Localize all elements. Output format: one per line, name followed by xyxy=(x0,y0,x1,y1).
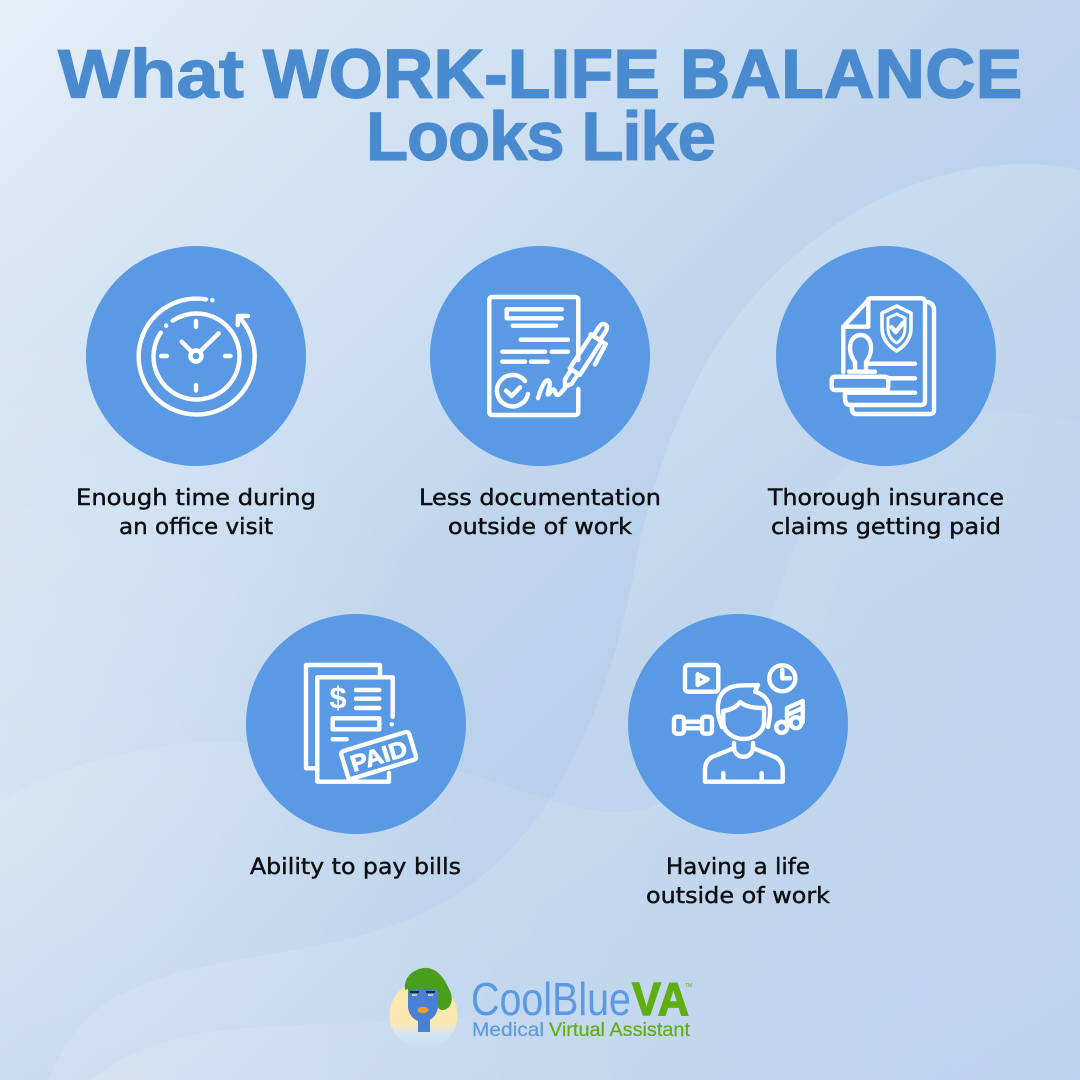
logo wordmark: CoolBlue xyxy=(471,973,631,1025)
label: insurance claims: claims getting paid xyxy=(771,514,1001,540)
label: insurance claims xyxy=(767,485,1004,540)
logo: CoolBlueVA xyxy=(390,968,692,1049)
icon: paid bills xyxy=(306,665,417,782)
logo wordmark: Virtual Assistant xyxy=(549,1020,691,1041)
label: insurance claims: Thorough insurance xyxy=(767,485,1004,511)
label: less documentation: Less documentation xyxy=(419,485,661,511)
title xyxy=(58,36,1022,175)
icon: paid bills: $ xyxy=(329,680,347,715)
logo wordmark xyxy=(471,973,692,1041)
logo wordmark: VA xyxy=(632,973,689,1025)
label: enough time xyxy=(76,485,316,540)
icon: paid bills: PAID xyxy=(347,735,410,777)
panel: ability to pay bills xyxy=(246,614,466,834)
logo wordmark: TM xyxy=(685,983,692,989)
label: enough time: Enough time during xyxy=(76,485,316,511)
icon: person with hobbies xyxy=(674,665,803,782)
logo wordmark: Medical xyxy=(472,1020,544,1041)
panel: thorough insurance claims getting paid xyxy=(776,246,996,466)
panel: less documentation outside of work xyxy=(430,246,650,466)
icon: signed document with pen xyxy=(489,297,616,415)
label: life outside of work: outside of work xyxy=(646,883,830,909)
panel: having a life outside of work xyxy=(628,614,848,834)
title: Looks Like xyxy=(366,98,716,175)
label: less documentation: outside of work xyxy=(448,514,632,540)
label: life outside of work xyxy=(646,854,830,909)
title: WORK-LIFE BALANCE xyxy=(263,36,1022,112)
label: enough time: an office visit xyxy=(119,514,273,540)
title: What xyxy=(58,36,244,112)
label: pay bills: Ability to pay bills xyxy=(250,854,461,880)
label: less documentation xyxy=(419,485,661,540)
logo mascot xyxy=(390,968,458,1049)
icon: insurance document with stamp xyxy=(832,298,934,414)
icon: clock with arrow xyxy=(139,299,255,415)
label: life outside of work: Having a life xyxy=(666,854,810,880)
panel: enough time during an office visit xyxy=(86,246,306,466)
